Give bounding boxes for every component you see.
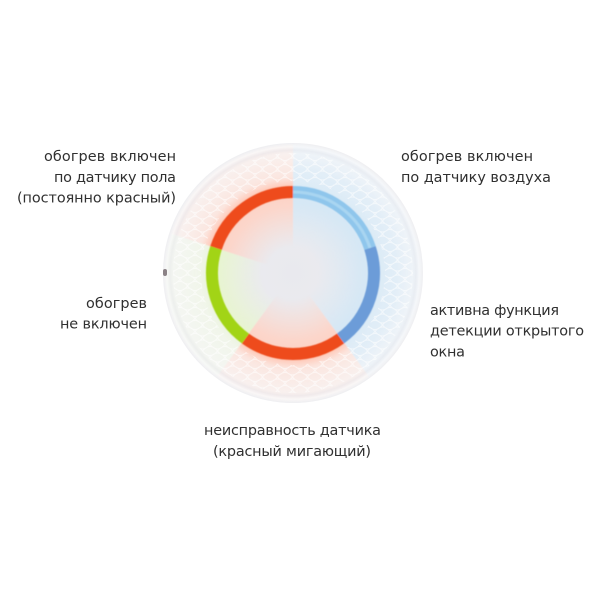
label: sensor fault: (красный мигающий) <box>213 444 371 460</box>
label: floor sensor heating: (постоянно красный) <box>17 190 176 206</box>
label: floor sensor heating <box>17 149 176 206</box>
ring segment: top red <box>216 192 293 248</box>
label: floor sensor heating: обогрев включен <box>44 149 176 165</box>
wedge: off green <box>163 233 293 378</box>
ring segment: light blue <box>293 192 370 248</box>
label: sensor fault <box>204 423 381 460</box>
wedge: floor sensor red <box>169 143 293 273</box>
label: open window function <box>430 303 584 360</box>
label: heating off: не включен <box>60 316 147 332</box>
device disc <box>163 143 423 403</box>
ring segment: green <box>212 248 245 338</box>
wedge: air sensor blue <box>293 143 417 273</box>
label: heating off <box>60 296 147 332</box>
label: floor sensor heating: по датчику пола <box>54 170 176 186</box>
wedge: sensor fault red <box>216 273 370 403</box>
label: open window function: детекции открытого <box>430 324 584 340</box>
label: air sensor heating: обогрев включен <box>401 149 533 165</box>
rim scale pattern <box>179 153 413 393</box>
label: open window function: окна <box>430 344 465 360</box>
label: sensor fault: неисправность датчика <box>204 423 381 439</box>
wedge: window detection blue <box>293 233 423 378</box>
label: air sensor heating <box>401 149 551 186</box>
ring segment: dark blue <box>341 248 374 338</box>
label: open window function: активна функция <box>430 303 559 319</box>
label: air sensor heating: по датчику воздуха <box>401 170 551 186</box>
side button <box>163 269 167 276</box>
indicator ring <box>212 192 374 354</box>
label: heating off: обогрев <box>86 296 147 312</box>
ring segment: bottom red <box>245 338 341 354</box>
coloured light wedges <box>163 143 423 403</box>
